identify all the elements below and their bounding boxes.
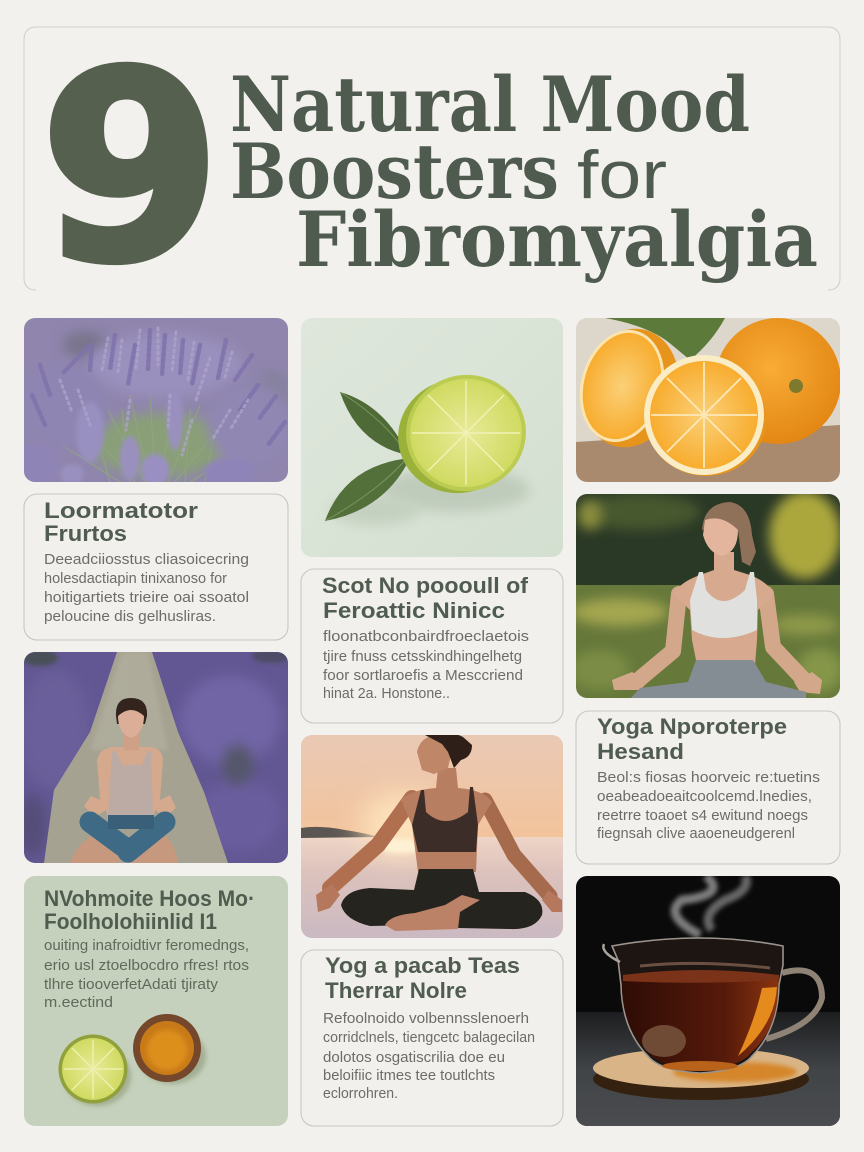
heading (44, 498, 199, 546)
header frame (24, 27, 840, 290)
body text (323, 629, 529, 702)
heading: Therrar Nolre (325, 978, 467, 1003)
icon: lime slice (58, 1034, 131, 1106)
heading: Feroattic Ninicc (323, 598, 505, 623)
feet (385, 895, 480, 931)
path (44, 652, 228, 863)
card: tea text (301, 950, 563, 1126)
body text: Deeadciiosstus cliasoicecring (44, 552, 249, 568)
body text: hinat 2a. Honstone.. (323, 686, 450, 702)
body text: eclorrohren. (323, 1086, 398, 1102)
whole orange (715, 318, 841, 444)
body text: fiegnsah clive aaoeneudgerenl (597, 826, 795, 842)
top (412, 787, 478, 852)
body text: ouiting inafroidtivr feromedngs, (44, 938, 249, 954)
lime (398, 383, 476, 494)
steam (675, 876, 713, 935)
body text: tjire fnuss cetsskindhingelhetg (323, 649, 522, 665)
glass cup (612, 938, 783, 1073)
torso (401, 768, 492, 872)
woman (84, 747, 176, 818)
heading: Loormatotor (44, 498, 199, 523)
body text: m.eectind (44, 995, 113, 1011)
icon: bowl of tea (133, 1014, 206, 1084)
photo: oranges (568, 318, 841, 482)
leaves (605, 318, 725, 360)
figure (316, 733, 562, 931)
woman (612, 502, 822, 698)
body text: hoitigartiets trieire oai ssoatol (44, 590, 249, 606)
heading: Yog a pacab Teas (325, 953, 520, 978)
body text (597, 770, 820, 842)
title line 2: for (577, 137, 667, 213)
body text: peloucine dis gelhusliras. (44, 609, 216, 625)
body text: reetrre toaoet s4 ewitund noegs (597, 808, 808, 824)
card: lavender text (24, 494, 288, 640)
body text: oeabeadoeaitcoolcemd.lnedies, (597, 789, 812, 805)
title line 1: Natural Mood (230, 60, 750, 149)
handle (766, 970, 822, 1039)
photo: cup of tea (576, 876, 840, 1126)
body text (44, 552, 249, 625)
card: lime text (301, 569, 563, 723)
photo: lime with leaves (301, 318, 563, 557)
arms (330, 798, 412, 888)
heading: Scot No poooull of (322, 573, 529, 598)
body text: foor sortlaroefis a Mesccriend (323, 668, 523, 684)
body text: beloifiic itmes tee toutlchts (323, 1068, 495, 1084)
body text: holesdactiapin tinixanoso for (44, 571, 227, 587)
heading: NVohmoite Hoos Mo· (44, 886, 255, 911)
body text: floonatbconbairdfroeclaetois (323, 629, 529, 645)
front half (653, 404, 765, 476)
body text: dolotos osgatiscrilia doe eu (323, 1050, 505, 1066)
body text: corridclnels, tiengcetc balagecilan (323, 1030, 535, 1046)
heading: Frurtos (44, 521, 127, 546)
photo: path through lavender with seated woman (18, 649, 292, 863)
title line 2: Boosters (230, 127, 559, 216)
leggings (341, 869, 542, 929)
heading: Hesand (597, 739, 684, 764)
big number 9: 9 (40, 18, 221, 320)
heading: Foolholohiinlid I1 (44, 909, 217, 934)
body text (323, 1011, 535, 1102)
heading (597, 714, 787, 764)
heading (325, 953, 520, 1003)
body text (44, 938, 249, 1011)
body text: erio usl ztoelbocdro rfres! rtos (44, 958, 249, 974)
body text: Refoolnoido volbennsslenoerh (323, 1011, 529, 1027)
card: yoga text (576, 711, 840, 864)
photo: lavender field (11, 318, 292, 487)
photo: yoga at sunset (301, 733, 563, 938)
heading (44, 886, 255, 934)
leaves (340, 392, 401, 454)
coaster (593, 1074, 809, 1100)
title line 3: Fibromyalgia (296, 195, 818, 284)
body text: Beol:s fiosas hoorveic re:tuetins (597, 770, 820, 786)
left half (596, 328, 676, 448)
title (40, 18, 818, 320)
photo: yoga in the park (570, 491, 842, 698)
heading: Yoga Nporoterpe (597, 714, 787, 739)
card: green panel (24, 876, 288, 1126)
head (417, 735, 452, 774)
body text: tlhre tiooverfetAdati tjiraty (44, 977, 219, 993)
heading (322, 573, 529, 623)
